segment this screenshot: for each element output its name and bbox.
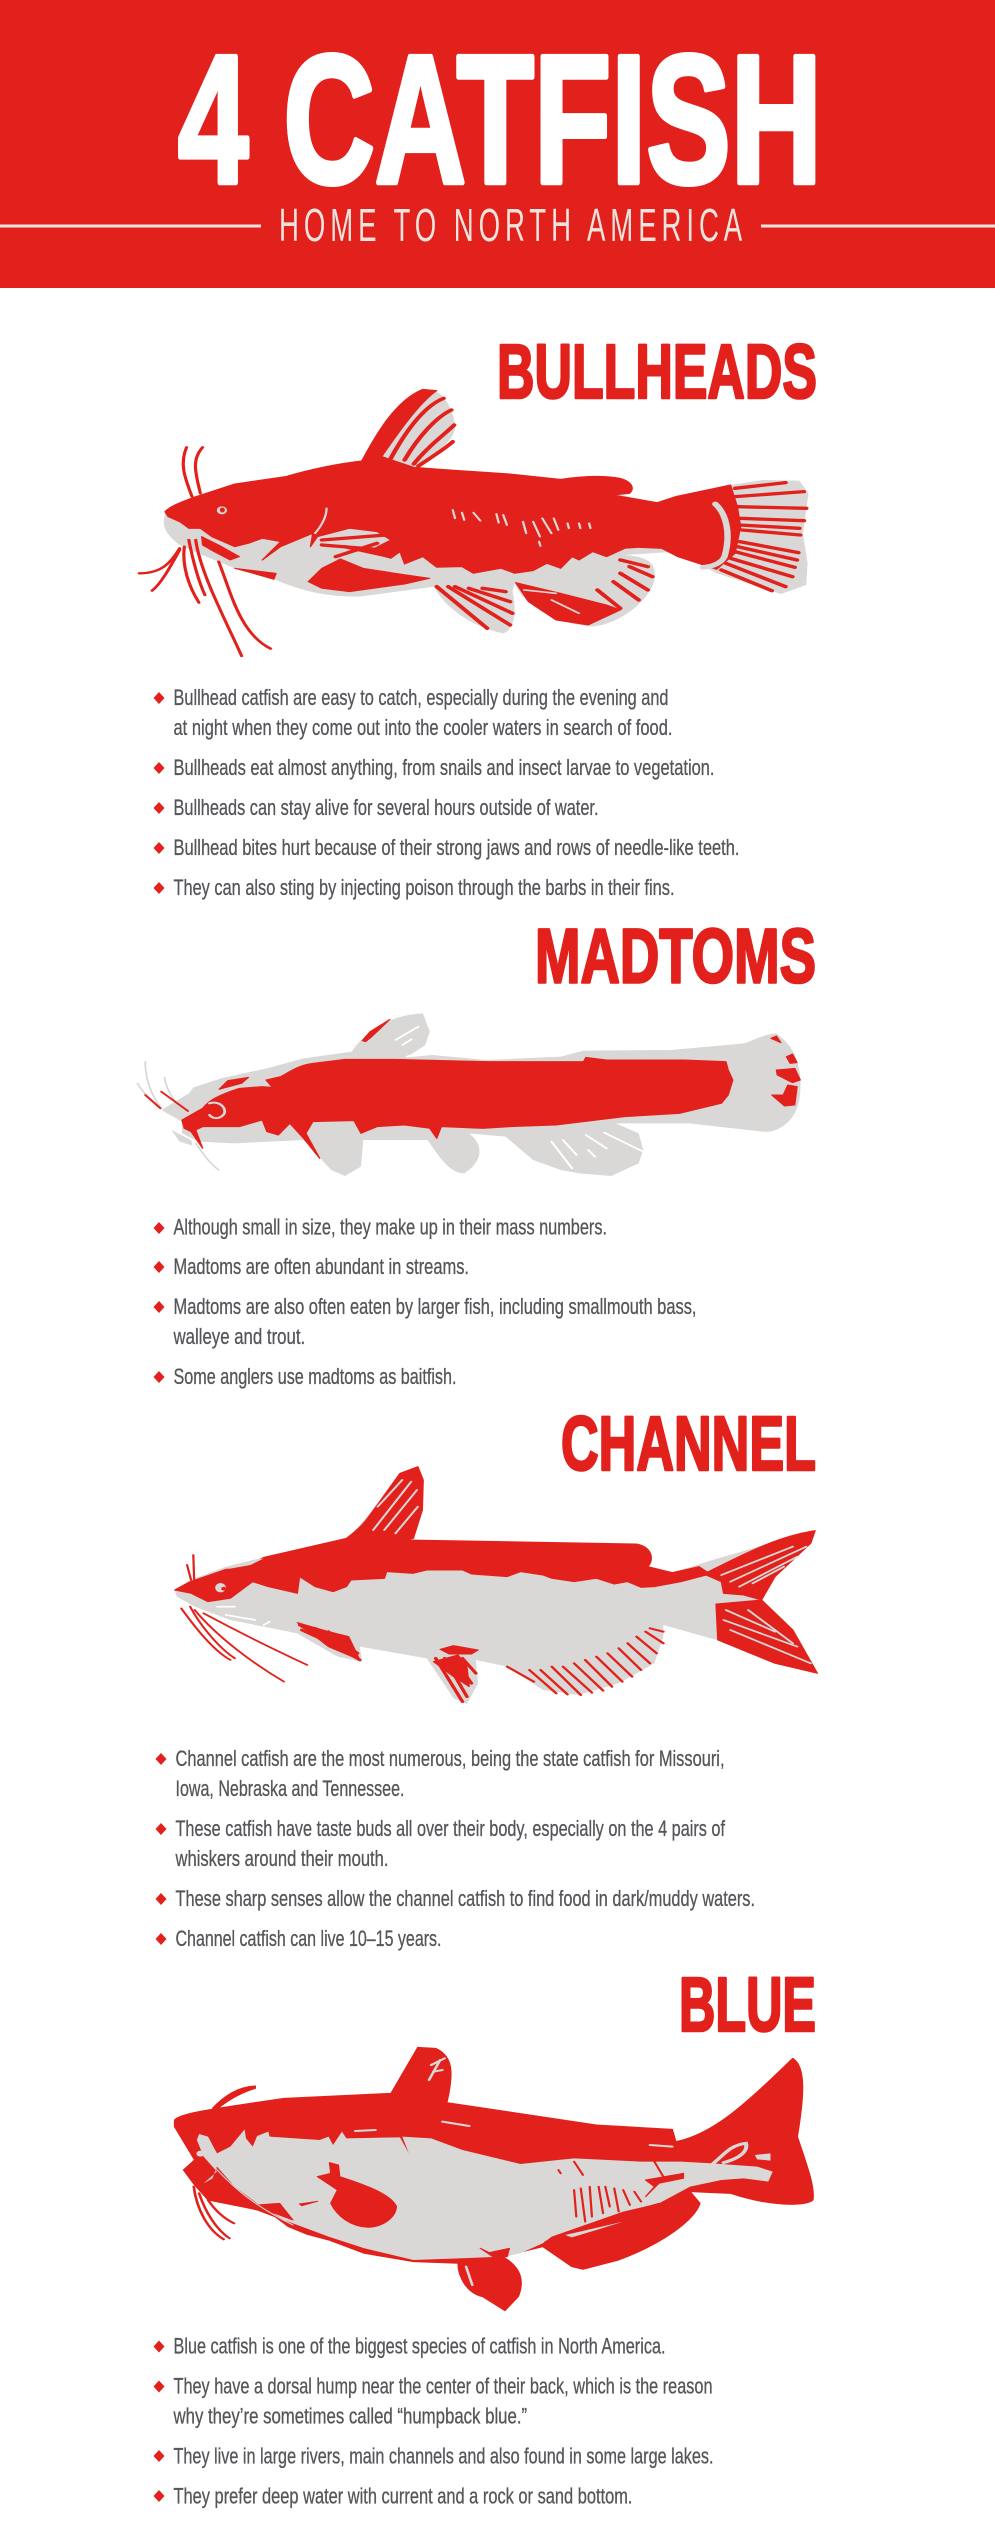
facts: channel: These sharp senses allow the channel catfish to find food in dark/muddy waters. bbox=[176, 1886, 755, 1911]
facts: channel: Channel catfish are the most numerous, being the state catfish for Missouri, bbox=[176, 1746, 724, 1771]
facts: bullheads: Bullheads can stay alive for several hours outside of water. bbox=[174, 795, 598, 820]
facts: blue bbox=[154, 2334, 714, 2508]
facts: bullheads: Bullhead bites hurt because of their strong jaws and rows of needle-like teeth. bbox=[174, 835, 740, 860]
facts: channel: Channel catfish can live 10–15 years. bbox=[176, 1926, 442, 1951]
heading: bullheads: BULLHEADS bbox=[497, 329, 817, 415]
facts: madtoms: Some anglers use madtoms as baitfish. bbox=[174, 1364, 456, 1389]
facts: bullheads: at night when they come out into the cooler waters in search of food. bbox=[174, 715, 672, 740]
illustration: bullhead catfish bbox=[139, 389, 809, 656]
facts: blue: Blue catfish is one of the biggest species of catfish in North America. bbox=[174, 2334, 666, 2358]
heading: channel: CHANNEL bbox=[561, 1401, 816, 1487]
facts: madtoms bbox=[154, 1214, 696, 1389]
subtitle rule left bbox=[0, 224, 261, 228]
facts: madtoms: Madtoms are often abundant in streams. bbox=[174, 1254, 469, 1279]
facts: blue: They prefer deep water with current and a rock or sand bottom. bbox=[174, 2484, 632, 2508]
facts: blue: They have a dorsal hump near the center of their back, which is the reason bbox=[174, 2374, 712, 2398]
facts: channel bbox=[156, 1746, 755, 1951]
illustration: madtom catfish bbox=[137, 1013, 800, 1176]
facts: madtoms: Madtoms are also often eaten by larger fish, including smallmouth bass, bbox=[174, 1294, 696, 1319]
subtitle rule right bbox=[761, 224, 995, 228]
facts: bullheads: Bullheads eat almost anything, from snails and insect larvae to vegetation. bbox=[174, 755, 714, 780]
heading: blue: BLUE bbox=[679, 1962, 816, 2048]
facts: bullheads: Bullhead catfish are easy to catch, especially during the evening and bbox=[174, 685, 668, 710]
facts: channel: These catfish have taste buds all over their body, especially on the 4 pairs of bbox=[176, 1816, 726, 1841]
facts: channel: Iowa, Nebraska and Tennessee. bbox=[176, 1776, 404, 1801]
facts: bullheads bbox=[154, 685, 740, 900]
illustration: channel catfish bbox=[175, 1466, 817, 1704]
subtitle: HOME TO NORTH AMERICA bbox=[279, 201, 743, 252]
heading: madtoms: MADTOMS bbox=[535, 914, 816, 1000]
facts: channel: whiskers around their mouth. bbox=[175, 1846, 388, 1871]
illustration: blue catfish bbox=[175, 2047, 813, 2311]
facts: blue: why they’re sometimes called “humpback blue.” bbox=[173, 2404, 527, 2428]
facts: blue: They live in large rivers, main channels and also found in some large lakes. bbox=[174, 2444, 714, 2468]
facts: madtoms: walleye and trout. bbox=[173, 1324, 305, 1349]
facts: bullheads: They can also sting by injecting poison through the barbs in their fins. bbox=[174, 875, 674, 900]
header banner bbox=[0, 0, 995, 288]
facts: madtoms: Although small in size, they make up in their mass numbers. bbox=[174, 1214, 607, 1240]
